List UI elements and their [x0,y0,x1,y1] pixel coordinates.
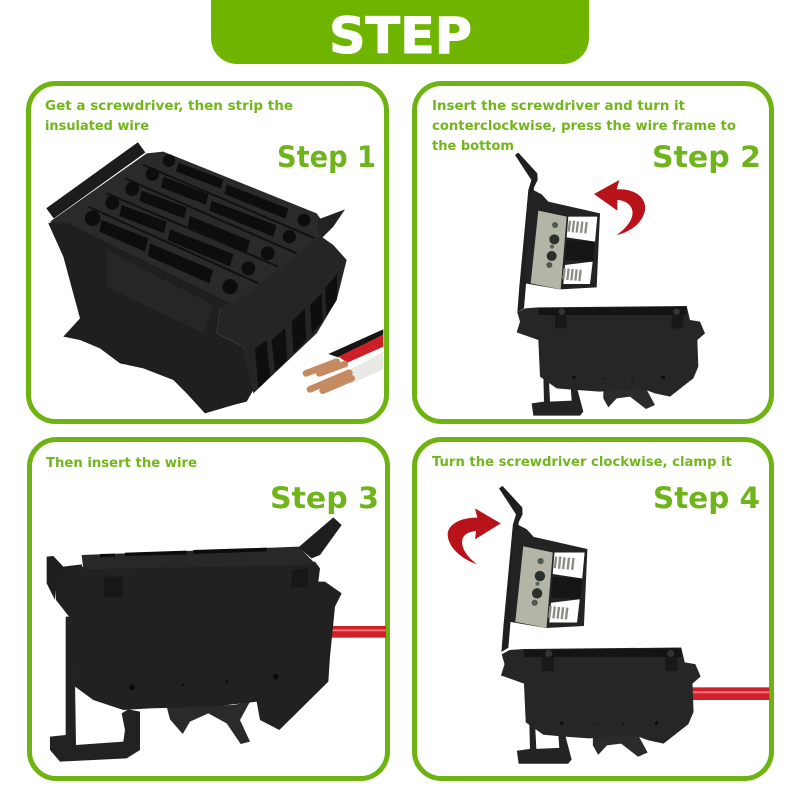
panel: step 4 [414,440,772,778]
image: closing terminal block with wire [499,486,769,764]
image: terminal block group with stripped wires [48,147,383,413]
step 4 heading: Step 4 [653,481,760,515]
panel: step 3 [30,440,388,778]
panel: step 2 [414,84,772,422]
step 2 heading: Step 2 [652,140,761,174]
step 1 instruction: Get a screwdriver, then strip the [45,99,293,114]
step 4 instruction: Turn the screwdriver clockwise, clamp it [432,455,732,470]
title text: STEP [329,7,472,65]
image: closed terminal block with wire [47,517,386,762]
step 2 instruction line 2: conterclockwise, press the wire frame to [432,119,736,134]
step 2 instruction line 1: Insert the screwdriver and turn it [432,99,685,114]
red wire [690,687,769,700]
stripped wires [306,329,383,391]
step 3 heading: Step 3 [270,481,379,515]
red wire [330,626,386,638]
icon: red curved arrow [594,180,645,235]
step 1 instruction line 2: insulated wire [45,119,149,134]
title banner [211,0,589,65]
panel: step 1 [28,84,386,422]
icon: red curved arrow [448,508,501,564]
step 2 instruction line 3: the bottom [432,139,514,154]
step 1 heading: Step 1 [277,140,376,174]
image: opened terminal block [515,153,705,416]
step 3 instruction: Then insert the wire [46,456,197,471]
